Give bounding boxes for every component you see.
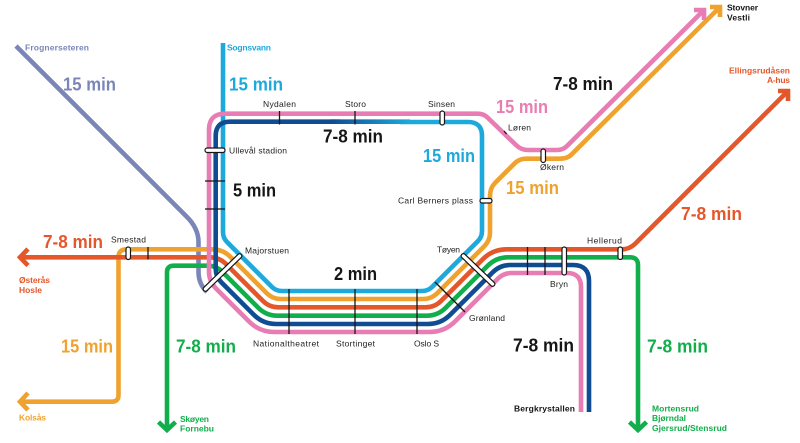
travel time labels: 15 min [496, 97, 548, 117]
line: navy Bergkrystallen [216, 122, 589, 412]
station name labels: Storo [345, 99, 366, 109]
station name labels: Sinsen [428, 99, 455, 109]
station name labels: Carl Berners plass [398, 196, 473, 206]
station name labels: Tøyen [437, 245, 460, 255]
station name labels: Økern [540, 162, 564, 172]
terminus labels: Fornebu [180, 424, 214, 434]
travel time labels: 7-8 min [553, 74, 613, 94]
travel time labels: 7-8 min [43, 232, 103, 252]
station name labels: Majorstuen [245, 245, 289, 255]
station markers [126, 111, 622, 334]
line: light blue Sognsvann [223, 43, 482, 291]
travel time labels: 15 min [423, 146, 475, 166]
station name labels: Bryn [550, 279, 568, 289]
terminus labels: Frognerseteren [25, 43, 89, 53]
travel time labels: 7-8 min [513, 336, 574, 356]
station name labels: Nydalen [263, 99, 296, 109]
terminus labels: Kolsås [19, 413, 46, 423]
station name labels: Hellerud [587, 235, 622, 245]
terminus labels: Stovner [727, 2, 759, 12]
line: red Østerås to Ellingsrudåsen [20, 91, 788, 307]
terminus labels: Skøyen [180, 414, 209, 424]
travel time labels: 15 min [506, 178, 559, 198]
terminus labels: Mortensrud [652, 403, 699, 413]
travel time labels: 15 min [229, 74, 283, 94]
station name labels: Smestad [111, 234, 146, 244]
arrowhead: orange Vestli [710, 7, 720, 17]
navy to blue fade on top segment [330, 119, 410, 124]
station name labels: Løren [508, 123, 531, 133]
station name labels: Stortinget [336, 339, 376, 349]
travel time labels: 5 min [233, 180, 276, 200]
station name labels: Oslo S [414, 339, 439, 349]
travel time labels: 7-8 min [681, 204, 742, 224]
line: purple Frognerseteren [16, 46, 207, 292]
line: orange Kolsås to Vestli [20, 7, 720, 410]
travel time labels: 15 min [63, 74, 116, 94]
station name labels: Grønland [469, 313, 505, 323]
line: pink Bergkrystallen to Stovner [209, 10, 704, 412]
terminus labels: Ellingsrudåsen [729, 66, 790, 76]
travel time labels: 7-8 min [647, 337, 708, 357]
travel time labels: 7-8 min [176, 337, 236, 357]
arrowhead: green Fornebu [158, 422, 176, 430]
station name labels: Nationaltheatret [253, 339, 320, 349]
terminus labels: Bjørndal [652, 413, 686, 423]
travel time labels: 15 min [61, 337, 113, 357]
terminus labels: Hosle [19, 285, 42, 295]
terminus labels: Vestli [727, 12, 750, 22]
travel time labels: 7-8 min [323, 126, 383, 146]
station name labels: Ullevål stadion [229, 146, 287, 156]
travel time labels: 2 min [334, 264, 377, 284]
station name labels [111, 99, 622, 413]
arrowhead: green Gjersrud [630, 422, 646, 430]
terminus labels: Østerås [19, 275, 50, 285]
terminus labels: Sognsvann [227, 43, 271, 53]
terminus labels: Gjersrud/Stensrud [652, 423, 727, 433]
arrowhead: red Ellingsrudåsen [778, 91, 788, 101]
line: green Fornebu to Gjersrud [158, 257, 646, 430]
travel time labels [43, 74, 742, 357]
arrowhead: red Østerås [20, 249, 28, 266]
arrowhead: pink Stovner [694, 10, 704, 20]
terminus labels: A-hus [767, 75, 790, 85]
arrowhead: orange Kolsås [20, 393, 28, 410]
station name labels: Bergkrystallen [514, 403, 575, 413]
